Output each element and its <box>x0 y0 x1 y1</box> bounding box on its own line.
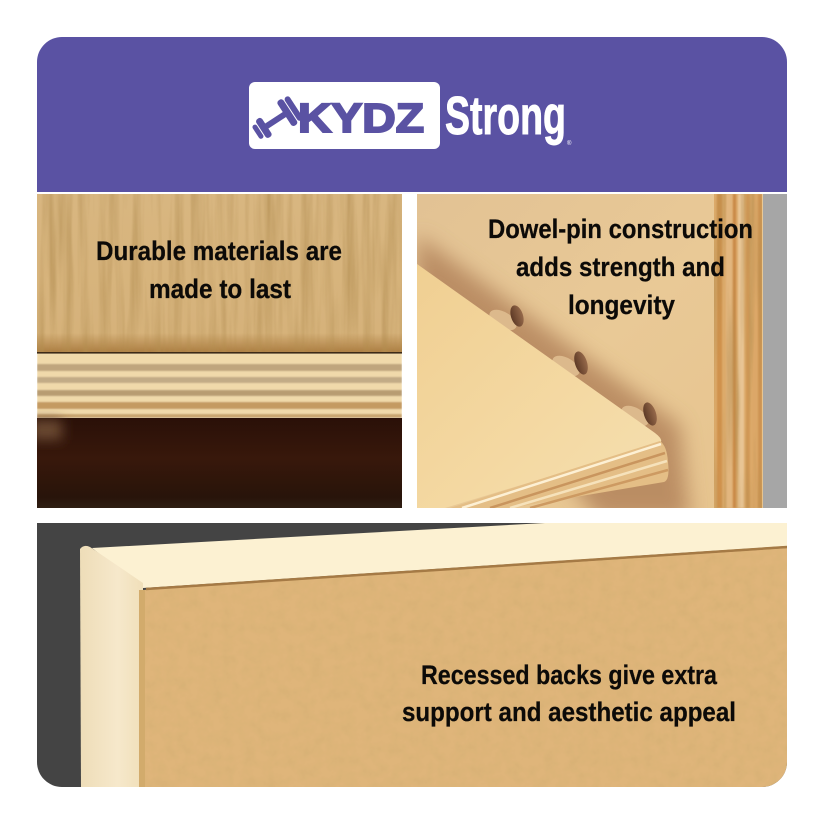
panel: recessed backs <box>37 523 787 787</box>
gray backdrop <box>763 194 787 508</box>
logo: KYDZ Strong <box>248 82 572 149</box>
dark backdrop <box>37 523 787 787</box>
text: recessed backs: Recessed backs give extra <box>421 660 718 690</box>
shelf top <box>417 264 661 508</box>
text: dowel-pin construction: adds strength and <box>516 252 725 282</box>
text: recessed backs: support and aesthetic appeal <box>402 697 736 727</box>
shelf shadow <box>417 235 690 520</box>
text: durable materials: made to last <box>149 274 291 304</box>
dowel pins and holes <box>486 304 659 430</box>
text: durable materials: Durable materials are <box>96 236 342 266</box>
text: dowel-pin construction: longevity <box>568 290 675 320</box>
cabinet top face <box>92 523 787 588</box>
header banner <box>37 37 787 192</box>
logo white badge <box>249 82 440 149</box>
text: recessed backs <box>402 660 736 727</box>
cabinet side face <box>80 546 143 787</box>
panel: dowel-pin construction <box>417 194 787 520</box>
text: dowel-pin construction <box>488 214 753 320</box>
cabinet back panel <box>139 548 787 787</box>
text: dowel-pin construction: Dowel-pin construction <box>488 214 753 244</box>
vertical side board <box>714 194 762 508</box>
plywood edge layers <box>37 352 402 418</box>
dark area below shelf <box>30 418 402 508</box>
logo word Strong: Strong <box>445 86 566 146</box>
text: durable materials <box>96 236 342 304</box>
panel: durable materials <box>30 194 402 508</box>
back wall <box>417 194 763 508</box>
icon: dumbbell <box>248 94 304 146</box>
registered mark: ® <box>567 140 572 147</box>
logo word KYDZ: KYDZ <box>298 95 424 141</box>
shelf plywood edge <box>450 441 668 508</box>
top plywood edge <box>146 547 787 589</box>
wood face <box>37 194 402 352</box>
